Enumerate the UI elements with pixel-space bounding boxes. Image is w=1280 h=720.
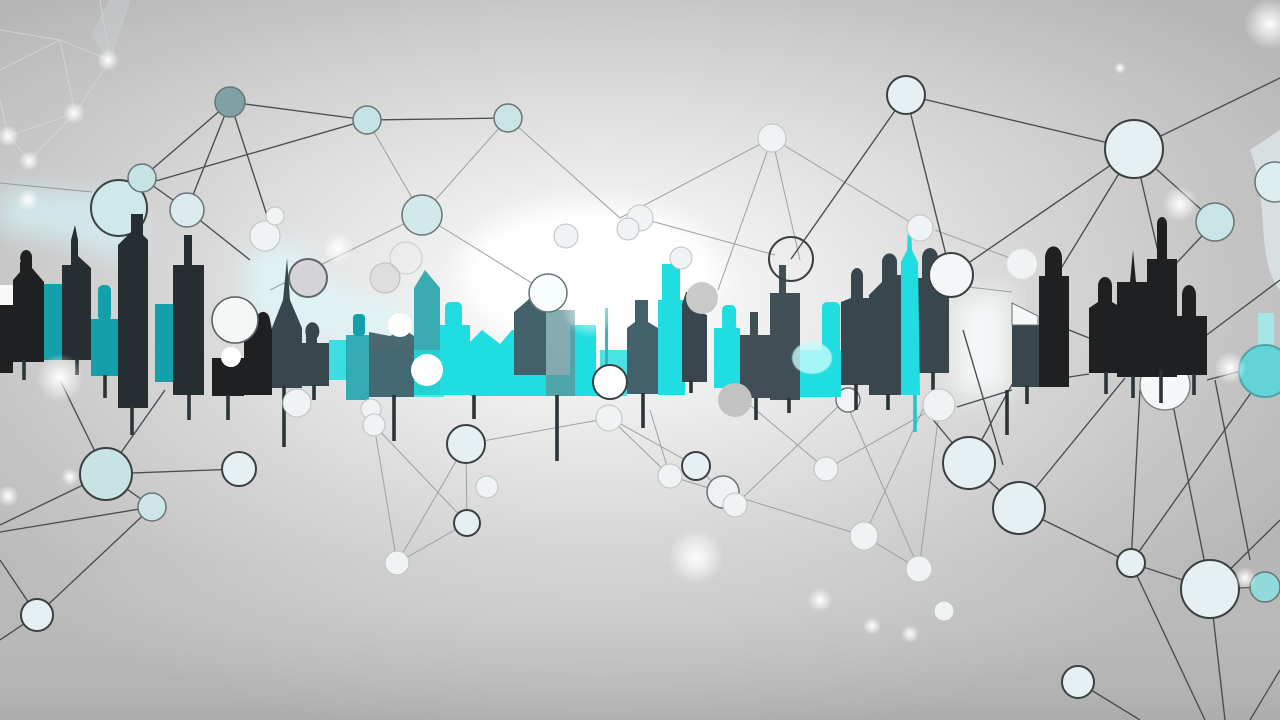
network nodes: faint xyxy=(250,124,1037,621)
network nodes: teal tinted xyxy=(128,87,1280,602)
teal flask node right edge xyxy=(1239,313,1280,397)
white solid nodes xyxy=(212,297,443,386)
back network lines xyxy=(0,118,1012,569)
nodes behind skyline xyxy=(91,180,1190,412)
faint network top left xyxy=(0,0,130,160)
skyline teal buildings xyxy=(44,264,841,400)
skyline drips xyxy=(24,358,1194,461)
skyline highlights xyxy=(0,285,1038,374)
skyline dark buildings xyxy=(0,214,1207,408)
cyan spire tower xyxy=(901,228,920,395)
